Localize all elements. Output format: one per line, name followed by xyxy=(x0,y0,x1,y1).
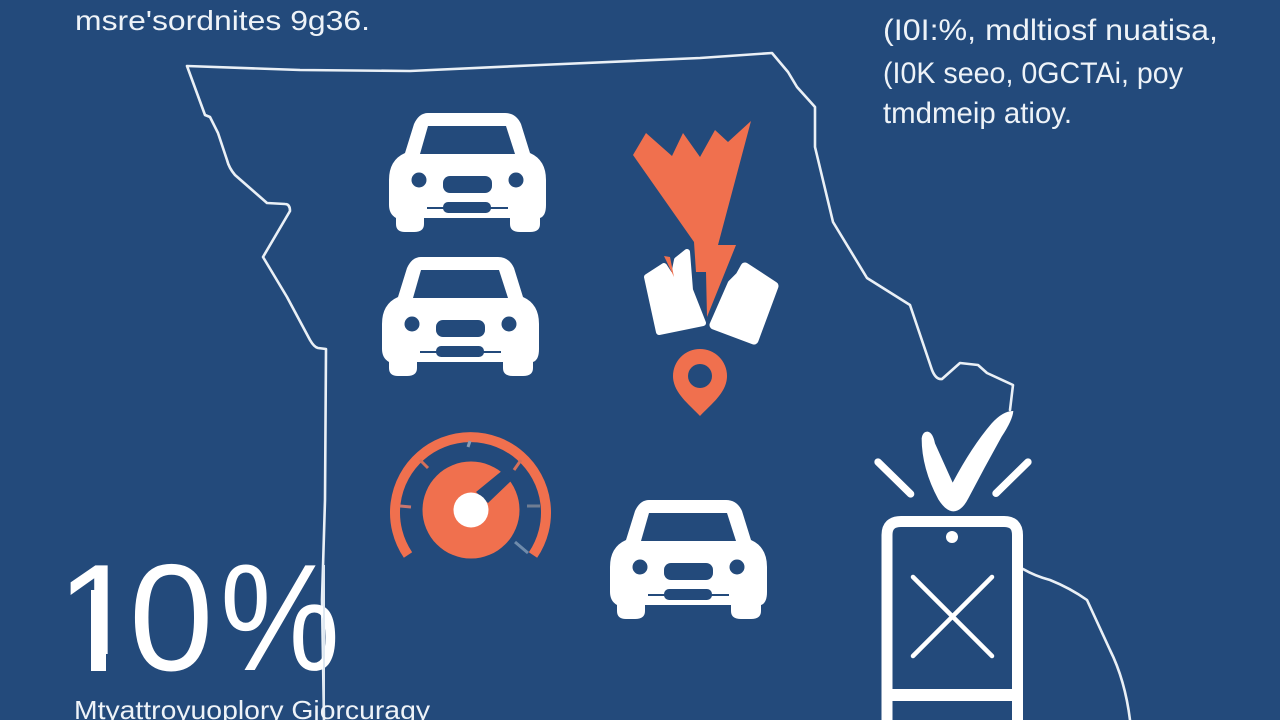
top right text block: tmdmeip atioy. xyxy=(883,97,1072,130)
icon: car bottom xyxy=(610,500,767,619)
map outline xyxy=(187,53,1130,720)
big statistic 10% xyxy=(44,533,340,703)
icon: car middle xyxy=(382,257,539,376)
map line over statistic xyxy=(323,565,325,720)
top right text block: (I0I:%, mdltiosf nuatisa, xyxy=(883,14,1218,47)
big statistic 10%: 1 xyxy=(56,533,141,703)
top left text: msre'sordnites 9g36. xyxy=(75,5,370,36)
icon: location pin xyxy=(673,349,727,416)
big statistic 10%: % xyxy=(220,533,340,703)
icon: phone with cross xyxy=(887,522,1018,720)
big statistic 10%: 0 xyxy=(129,533,214,703)
top right text block xyxy=(883,14,1218,130)
icon: lightning bolt splitting a card xyxy=(633,121,774,340)
icon: speedometer gauge xyxy=(395,437,546,558)
icon: check mark with rays xyxy=(878,411,1028,511)
top right text block: (I0K seeo, 0GCTAi, poy xyxy=(883,57,1183,90)
icon: car top xyxy=(389,113,546,232)
